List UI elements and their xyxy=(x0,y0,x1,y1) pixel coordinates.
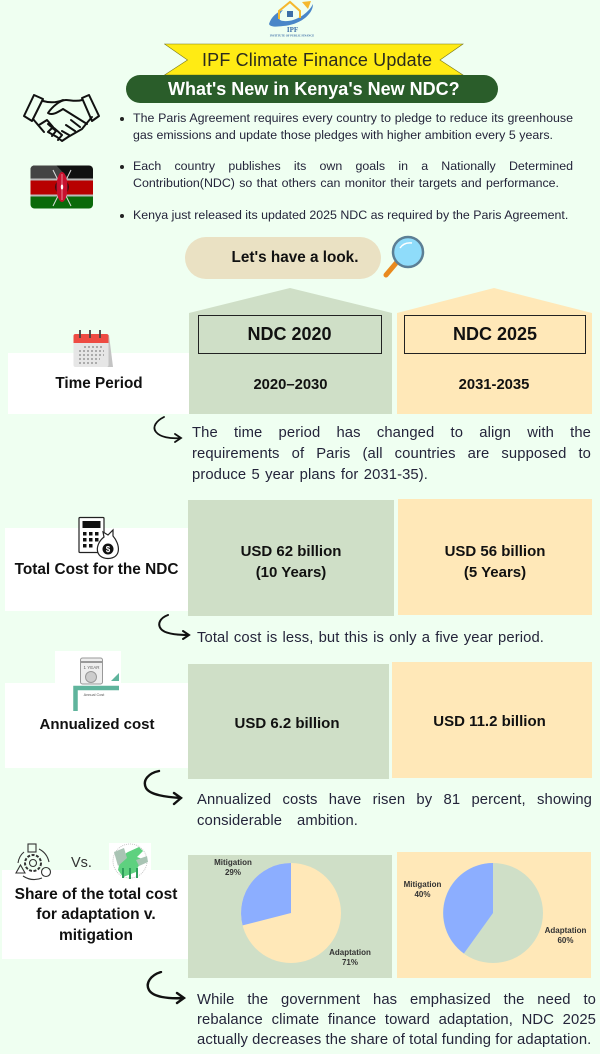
bullet: Nationally Determined Contribution: Each country publishes its own goals in a Nationally Determined xyxy=(133,159,573,173)
callout pill: Let's have a look.: Let's have a look. xyxy=(232,249,358,266)
panel: NDC 2025 total cost xyxy=(398,499,592,615)
arrow: time period note xyxy=(154,416,182,443)
bullet: Paris Agreement pledges: gas emissions and update those pledges with higher ambition every 5 years. xyxy=(133,128,553,142)
panel: NDC 2025 total cost: USD 56 billion xyxy=(445,543,545,560)
bullet: Kenya released 2025 NDC: Kenya just released its updated 2025 NDC as required by the Paris Agreement. xyxy=(133,208,568,222)
text: 2031-2035: 2031-2035 xyxy=(459,377,529,393)
icon: annual cost calendar: 1 YEAR xyxy=(84,665,100,670)
logo: IPF Institute of Public Finance xyxy=(269,0,314,38)
heading: NDC 2020 xyxy=(198,315,382,354)
row label: Total Cost for the NDC: Total Cost for the NDC xyxy=(15,560,178,578)
banner: IPF Climate Finance Update: IPF Climate Finance Update xyxy=(202,50,432,70)
bullet: Paris Agreement pledges: The Paris Agreement requires every country to pledge to reduce its greenhouse xyxy=(133,111,573,125)
panel: NDC 2020 total cost xyxy=(188,500,394,616)
icon: Kenya flag xyxy=(30,166,93,208)
pie chart: 71% adaptation, 29% mitigation xyxy=(241,863,341,963)
text: adaptation share note xyxy=(197,992,596,1048)
icon: calculator and money bag: $ xyxy=(106,545,111,554)
label: Mitigation 40%: 40% xyxy=(414,890,430,899)
text: time period note: The time period has changed to align with the xyxy=(192,425,591,441)
panel: NDC 2020 column header xyxy=(189,288,392,414)
text: annualized cost note: Annualized costs have risen by 81 percent, showing xyxy=(197,792,592,808)
arrow: adaptation share note xyxy=(146,971,186,1004)
panel: NDC 2020 total cost: (10 Years) xyxy=(256,564,326,581)
row label: Time Period xyxy=(8,353,189,414)
label: Mitigation 29%: Mitigation xyxy=(214,858,252,867)
label: Adaptation 60% xyxy=(544,926,586,945)
text: total cost note: Total cost is less, but this is only a five year period. xyxy=(197,630,544,646)
label: Adaptation 71%: 71% xyxy=(342,958,358,967)
row label: share of the total cost: for adaptation v. xyxy=(36,906,156,923)
title pill: What's New in Kenya's New NDC?: What's New in Kenya's New NDC? xyxy=(168,79,460,99)
text: adaptation share note: actually decreases the share of total funding for adaptation. xyxy=(197,1032,591,1048)
panel: NDC 2020 total cost: USD 62 billion xyxy=(241,543,341,560)
icon: calendar xyxy=(74,330,113,367)
text: annualized cost note xyxy=(197,792,592,829)
panel: NDC 2025 annualized cost xyxy=(392,662,592,778)
text: 2020–2030: 2020–2030 xyxy=(253,377,328,393)
heading: NDC 2020: NDC 2020 xyxy=(247,324,332,344)
panel: NDC 2025 pie chart xyxy=(396,852,591,978)
row label: share of the total cost xyxy=(2,870,188,959)
icon: adaptation plant and people xyxy=(109,843,151,879)
panel: NDC 2020 pie chart xyxy=(188,855,392,978)
banner: IPF Climate Finance Update xyxy=(164,44,464,75)
label: Mitigation 29% xyxy=(214,858,252,877)
panel: NDC 2025 annualized cost: USD 11.2 billion xyxy=(433,713,546,730)
icon: annual cost calendar xyxy=(55,651,121,711)
row label: Total Cost for the NDC xyxy=(5,528,188,610)
icon: mitigation gear cycle xyxy=(15,843,51,880)
label: Adaptation 71%: Adaptation xyxy=(329,948,371,957)
bullet: Nationally Determined Contribution xyxy=(120,159,573,190)
text: Vs.: Vs. xyxy=(71,855,92,871)
pie chart: 60% adaptation, 40% mitigation xyxy=(443,863,543,963)
label: Mitigation 40%: Mitigation xyxy=(404,880,441,889)
label: Mitigation 29%: 29% xyxy=(225,868,241,877)
bullet: Nationally Determined Contribution: Contribution(NDC) so that others can monitor their targets and performance. xyxy=(133,176,559,190)
panel: NDC 2025 total cost: (5 Years) xyxy=(464,564,526,581)
icon: annual cost calendar: Annual Cost xyxy=(84,693,105,697)
panel: NDC 2025 column header xyxy=(397,288,592,414)
row label: Time Period: Time Period xyxy=(55,375,143,392)
text: adaptation share note: While the government has emphasized the need to xyxy=(197,992,596,1008)
label: Adaptation 60%: 60% xyxy=(557,936,574,945)
panel: NDC 2020 annualized cost: USD 6.2 billion xyxy=(234,715,340,732)
title pill: What's New in Kenya's New NDC? xyxy=(126,75,498,103)
panel: NDC 2020 annualized cost xyxy=(188,664,388,779)
row label: share of the total cost: Share of the total cost xyxy=(15,886,177,903)
arrow: annualized cost note xyxy=(144,770,183,806)
callout pill: Let's have a look. xyxy=(185,237,381,279)
text: adaptation share note: rebalance climate finance toward adaptation, NDC 2025 xyxy=(197,1012,596,1028)
text: time period note xyxy=(192,425,591,483)
heading: NDC 2025 xyxy=(404,315,586,354)
row label: Annualized cost xyxy=(5,683,188,768)
logo: IPF Institute of Public Finance: INSTITUTE OF PUBLIC FINANCE xyxy=(270,34,314,38)
text: time period note: produce 5 year plans for 2031-35). xyxy=(192,467,428,483)
bullet: Paris Agreement pledges xyxy=(120,111,573,142)
row label: share of the total cost: mitigation xyxy=(59,927,133,944)
arrow: total cost note xyxy=(158,614,191,640)
bullet list: Paris Agreement context xyxy=(120,111,573,222)
row label: Annualized cost: Annualized cost xyxy=(39,716,154,733)
icon: handshake xyxy=(23,94,100,142)
text: time period note: requirements of Paris (all countries are supposed to xyxy=(192,446,591,462)
label: Adaptation 71% xyxy=(329,948,371,967)
label: Mitigation 40% xyxy=(404,880,441,899)
icon: calculator and money bag xyxy=(78,516,119,560)
text: annualized cost note: considerable ambition. xyxy=(197,813,358,829)
label: Adaptation 60%: Adaptation xyxy=(545,926,586,935)
icon: magnifying glass xyxy=(384,236,424,278)
logo: IPF Institute of Public Finance: IPF xyxy=(287,26,298,34)
heading: NDC 2025: NDC 2025 xyxy=(453,324,537,344)
